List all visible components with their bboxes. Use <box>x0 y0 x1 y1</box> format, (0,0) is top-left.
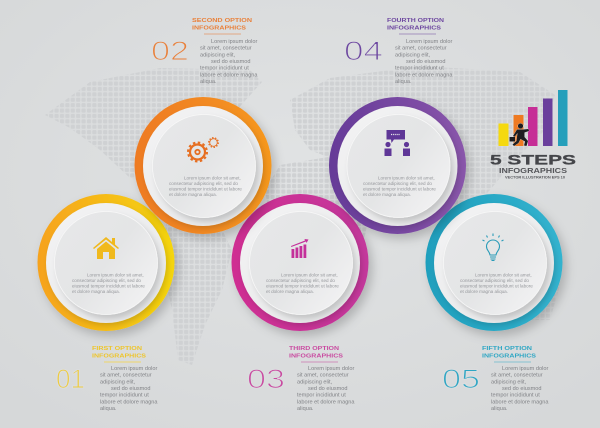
icon: two people talking <box>384 130 410 156</box>
description: sit amet, consectetur <box>200 46 252 52</box>
heading: FIFTH OPTION <box>482 346 532 352</box>
description: adipiscing elit, <box>491 380 527 386</box>
description: labore et dolore magna <box>200 72 258 78</box>
heading: INFOGRAPHICS <box>192 26 246 32</box>
description: sed do eiusmod <box>211 59 250 65</box>
number: 05 <box>442 364 480 394</box>
heading: THIRD OPTION <box>289 346 339 352</box>
underline <box>104 362 141 363</box>
outer disc <box>338 106 458 226</box>
description: adipiscing elit, <box>395 52 431 58</box>
inner disc <box>444 212 546 314</box>
description: Lorem ipsum dolor <box>502 366 548 372</box>
outer disc <box>46 203 166 323</box>
description: aliqua. <box>395 79 412 85</box>
description: aliqua. <box>491 406 508 412</box>
label block: second option <box>151 18 258 85</box>
circle text: consectetur adipiscing elit, sed do <box>460 278 529 283</box>
circle text: et dolore magna aliqua. <box>460 289 508 294</box>
description: sed do eiusmod <box>406 59 446 65</box>
description: Lorem ipsum dolor <box>111 366 157 372</box>
heading: FOURTH OPTION <box>387 18 444 24</box>
step 2 circle <box>134 97 272 234</box>
heading: FIRST OPTION <box>92 346 142 352</box>
description: tempor incididunt ut <box>395 66 444 72</box>
description: labore et dolore magna <box>491 400 549 406</box>
step 5 circle <box>426 194 562 331</box>
world map dotted background <box>45 66 560 365</box>
icon: running businessman <box>510 123 529 146</box>
description: adipiscing elit, <box>100 380 136 386</box>
description: sed do eiusmod <box>502 386 542 392</box>
description: sit amet, consectetur <box>491 372 543 378</box>
heading: INFOGRAPHICS <box>289 354 343 360</box>
description: tempor incididunt ut <box>100 392 149 398</box>
ring: purple <box>329 97 466 234</box>
number: 02 <box>151 36 189 66</box>
circle text: Lorem ipsum dolor sit amet, <box>281 272 338 278</box>
circle text: et dolore magna aliqua. <box>169 192 217 197</box>
underline <box>301 362 338 363</box>
underline <box>399 34 436 35</box>
step 3 circle <box>232 194 368 331</box>
inner disc <box>152 114 256 218</box>
underline <box>494 362 531 363</box>
description: Lorem ipsum dolor <box>308 366 354 372</box>
heading: SECOND OPTION <box>192 18 252 24</box>
logo caption: VECTOR ILLUSTRATION EPS 10 <box>505 176 565 180</box>
label block: first option <box>56 346 158 412</box>
outer disc <box>240 203 360 323</box>
circle text: eiusmod tempor incididunt ut labore <box>363 186 436 192</box>
label block: third option <box>247 346 355 412</box>
description: sit amet, consectetur <box>297 372 349 378</box>
description: labore et dolore magna <box>395 72 453 78</box>
label block: fifth option <box>442 346 549 412</box>
description: adipiscing elit, <box>200 52 236 58</box>
circle text: et dolore magna aliqua. <box>363 192 411 197</box>
number: 01 <box>56 364 85 394</box>
circle text: eiusmod tempor incididunt ut labore <box>72 284 145 288</box>
description: sed do eiusmod <box>111 386 150 392</box>
circle text: consectetur adipiscing elit, sed do <box>266 278 335 283</box>
description: tempor incididunt ut <box>297 392 346 398</box>
underline <box>204 34 241 35</box>
outer disc <box>143 106 263 226</box>
ring: orange <box>134 97 272 234</box>
description: tempor incididunt ut <box>491 392 540 398</box>
icon: light bulb <box>482 234 504 260</box>
inner disc <box>54 212 158 314</box>
circle text: eiusmod tempor incididunt ut labore <box>266 284 339 288</box>
circle text: Lorem ipsum dolor sit amet, <box>475 272 532 278</box>
icon: house <box>93 237 119 259</box>
circle text: consectetur adipiscing elit, sed do <box>169 181 238 186</box>
description: aliqua. <box>200 79 217 85</box>
circle text: et dolore magna aliqua. <box>266 289 314 294</box>
ring: teal <box>426 194 562 331</box>
logo: 5 steps <box>490 90 576 180</box>
description: Lorem ipsum dolor <box>211 39 257 45</box>
heading: INFOGRAPHICS <box>92 354 146 360</box>
circle text: Lorem ipsum dolor sit amet, <box>184 176 241 180</box>
circle text: et dolore magna aliqua. <box>72 289 120 294</box>
logo title: 5 STEPS <box>490 152 576 168</box>
description: sit amet, consectetur <box>395 46 447 52</box>
circle text: eiusmod tempor incididunt ut labore <box>460 284 533 288</box>
inner disc <box>250 212 352 314</box>
step 1 circle <box>38 194 174 331</box>
circle text: Lorem ipsum dolor sit amet, <box>378 176 435 180</box>
description: sed do eiusmod <box>308 386 348 392</box>
heading: INFOGRAPHICS <box>482 354 536 360</box>
circle text: eiusmod tempor incididunt ut labore <box>169 186 242 192</box>
inner disc <box>347 114 450 218</box>
icon: bar chart with arrow <box>291 239 308 258</box>
heading: INFOGRAPHICS <box>387 26 441 32</box>
number: 04 <box>344 36 383 66</box>
icon: gears <box>188 138 218 162</box>
circle text: Lorem ipsum dolor sit amet, <box>87 272 144 278</box>
label block: fourth option <box>344 18 453 85</box>
description: labore et dolore magna <box>100 400 158 406</box>
step 4 circle <box>329 97 466 234</box>
logo subtitle: INFOGRAPHICS <box>499 168 567 175</box>
description: adipiscing elit, <box>297 380 333 386</box>
circle text: consectetur adipiscing elit, sed do <box>363 181 432 186</box>
ring: magenta <box>232 194 368 331</box>
description: labore et dolore magna <box>297 400 355 406</box>
stair bar chart <box>498 90 568 146</box>
description: aliqua. <box>297 406 314 412</box>
ring: yellow <box>38 194 174 331</box>
description: aliqua. <box>100 406 117 412</box>
description: Lorem ipsum dolor <box>406 39 452 45</box>
description: sit amet, consectetur <box>100 372 152 378</box>
description: tempor incididunt ut <box>200 66 249 72</box>
outer disc <box>434 203 554 323</box>
number: 03 <box>247 364 285 394</box>
circle text: consectetur adipiscing elit, sed do <box>72 278 141 283</box>
